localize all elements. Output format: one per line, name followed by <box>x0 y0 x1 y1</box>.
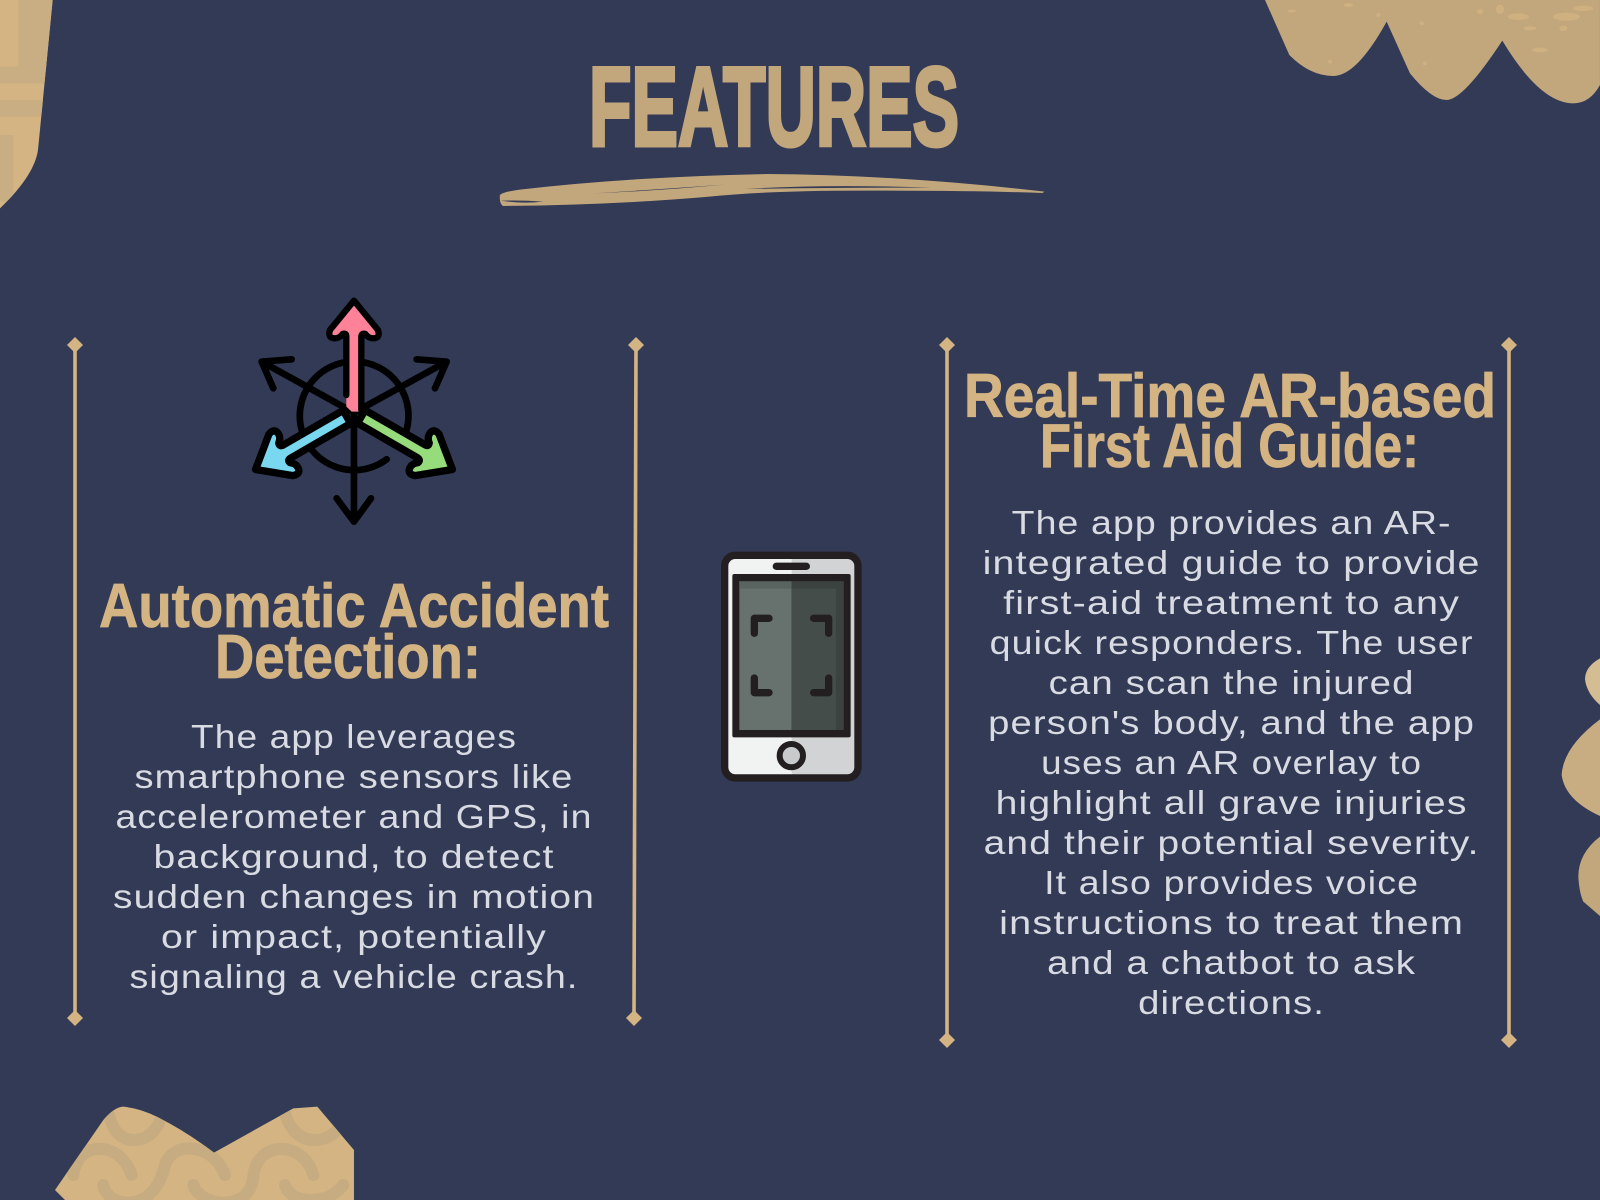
text block: AR first aid description: directions. <box>1138 985 1325 1022</box>
heading: automatic accident detection <box>99 572 609 692</box>
text block: automatic accident description: The app leverages <box>191 719 517 756</box>
decoration: right-edge blobs <box>1562 658 1600 916</box>
text block: AR first aid description: The app provides an AR- <box>1012 505 1452 542</box>
text block: AR first aid description: integrated guide to provide <box>983 545 1481 582</box>
text block: AR first aid description: uses an AR overlay to <box>1041 745 1422 782</box>
heading: automatic accident detection: Detection: <box>215 623 481 692</box>
panel: real-time AR first aid guide <box>939 337 1517 1048</box>
text block: automatic accident description: accelerometer and GPS, in <box>116 799 592 836</box>
title: FEATURES <box>589 44 959 170</box>
text block: automatic accident description: sudden changes in motion <box>113 879 595 916</box>
text block: AR first aid description: first-aid treatment to any <box>1003 585 1460 622</box>
text block: AR first aid description: can scan the injured <box>1049 665 1415 702</box>
left panel rules with diamonds <box>67 337 644 1026</box>
panel: automatic accident detection <box>67 301 644 1026</box>
heading: real-time AR-based first aid guide: First Aid Guide: <box>1040 412 1419 481</box>
text block: automatic accident description: or impact, potentially <box>161 919 547 956</box>
text block: automatic accident description: signaling a vehicle crash. <box>130 959 578 996</box>
decoration: top-right corner shape <box>1265 0 1600 103</box>
text block: AR first aid description: It also provides voice <box>1044 865 1419 902</box>
text block: AR first aid description <box>983 505 1481 1022</box>
text block: automatic accident description: background, to detect <box>154 839 554 876</box>
icon: smartphone with AR scan <box>725 555 858 778</box>
heading: automatic accident detection: Automatic Accident <box>99 572 609 641</box>
text block: AR first aid description: and their potential severity. <box>984 825 1480 862</box>
right panel rules with diamonds <box>939 337 1517 1048</box>
title underline brush stroke <box>500 174 1044 206</box>
icon: motion sensor arrows <box>243 301 465 522</box>
text block: AR first aid description: instructions to treat them <box>999 905 1464 942</box>
text block: automatic accident description <box>113 719 595 996</box>
heading: real-time AR-based first aid guide <box>964 362 1496 481</box>
decoration: top-left corner shape <box>0 0 53 208</box>
decoration: bottom-left corner shape <box>55 1107 354 1200</box>
text block: AR first aid description: highlight all grave injuries <box>996 785 1468 822</box>
text block: AR first aid description: quick responders. The user <box>990 625 1474 662</box>
heading: real-time AR-based first aid guide: Real-Time AR-based <box>964 362 1496 431</box>
text block: AR first aid description: person's body, and the app <box>988 705 1475 742</box>
text block: automatic accident description: smartphone sensors like <box>134 759 574 796</box>
text block: AR first aid description: and a chatbot to ask <box>1047 945 1416 982</box>
